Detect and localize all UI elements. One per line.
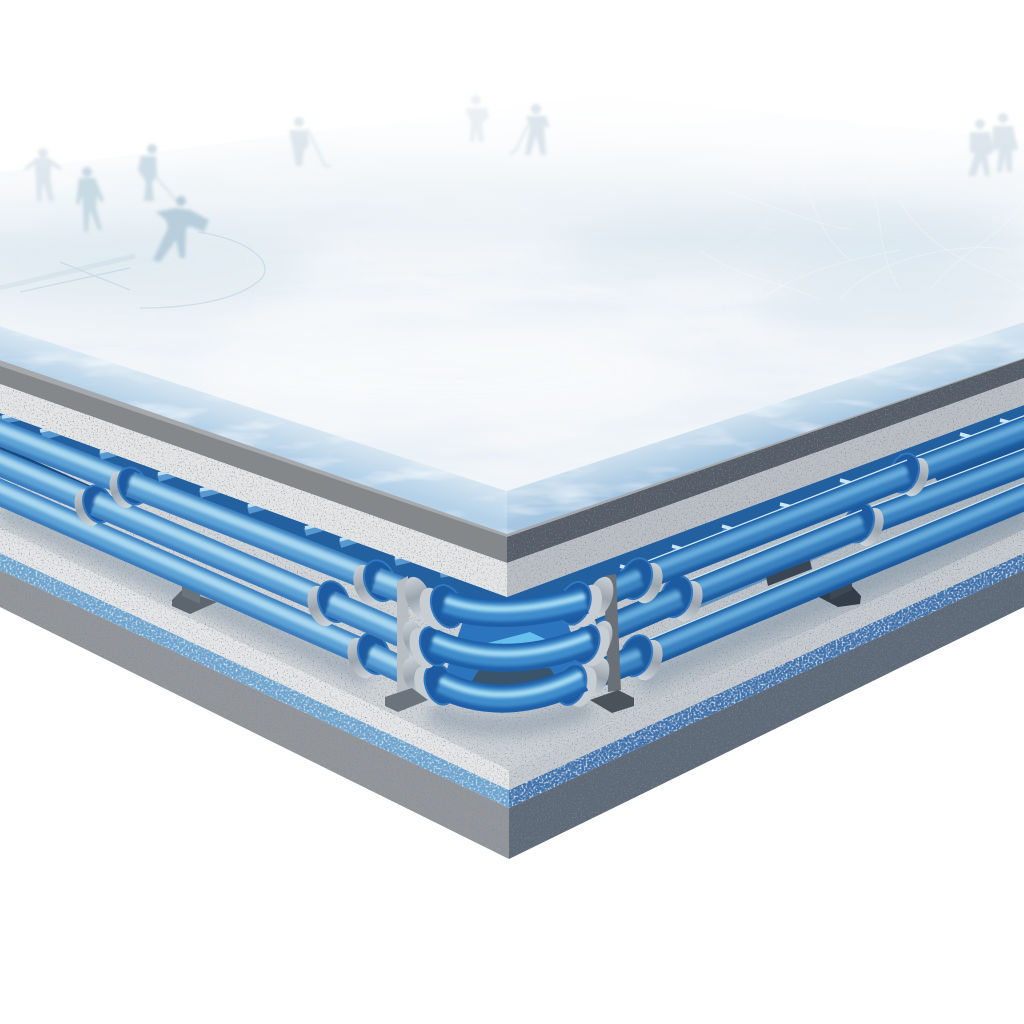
- flange left top 2: [348, 556, 401, 609]
- lip of upper concrete layer: [0, 355, 1024, 537]
- skater standing: [76, 167, 104, 232]
- corner bracket rear right: [604, 574, 621, 692]
- elbow bottom: [398, 654, 614, 712]
- lower concrete slab: [0, 405, 1024, 790]
- skater pair right: [968, 113, 1018, 176]
- skate scratches: [700, 206, 994, 299]
- flange right top 2: [615, 554, 668, 607]
- flange right top: [884, 449, 934, 500]
- flange right middle 2: [655, 572, 708, 625]
- pipe supports: [172, 572, 861, 614]
- flange left middle: [70, 481, 117, 530]
- pipe stripes left: [0, 414, 470, 574]
- skaters: [24, 95, 1018, 262]
- left pipes top row: [0, 425, 415, 609]
- right pipes bottom row: [600, 479, 1024, 684]
- pipe shadows on slab: [0, 510, 1024, 726]
- left pipes middle row: [0, 455, 410, 638]
- rink markings: [0, 232, 265, 308]
- flange left bottom: [342, 629, 395, 682]
- right pipes middle row: [600, 445, 1024, 632]
- base layer: grey concrete: [0, 570, 1024, 859]
- flange right bottom: [615, 631, 668, 684]
- skater with broom: [289, 117, 331, 166]
- skater far back: [465, 95, 489, 142]
- cavity: lateral chiller pipes behind: [0, 405, 1024, 712]
- corner bracket front left: [397, 576, 410, 700]
- elbow top: [400, 573, 618, 636]
- elbow middle: [398, 617, 617, 673]
- skater far left arms out: [24, 148, 62, 201]
- upper grey concrete layer: [0, 357, 1024, 563]
- pipe stripes right: [620, 420, 1024, 580]
- blue insulation layer: [0, 553, 1024, 808]
- ice slab side faces: [0, 322, 1024, 534]
- support right: [813, 572, 861, 607]
- bracket feet: [385, 688, 634, 713]
- ice top surface: [0, 151, 1024, 490]
- left pipes bottom row: [0, 484, 415, 682]
- flange left middle 2: [302, 577, 355, 630]
- skater with broom back: [510, 104, 550, 155]
- flange left top: [105, 463, 152, 512]
- right pipes top row: [600, 412, 1024, 607]
- skater large centre: [153, 196, 209, 262]
- illustration: ice rink layered cross-section: [0, 95, 1024, 859]
- light insulation layer: [0, 378, 1024, 597]
- skater with stick: [138, 144, 176, 201]
- support left: [172, 578, 217, 614]
- flange right middle: [839, 499, 889, 550]
